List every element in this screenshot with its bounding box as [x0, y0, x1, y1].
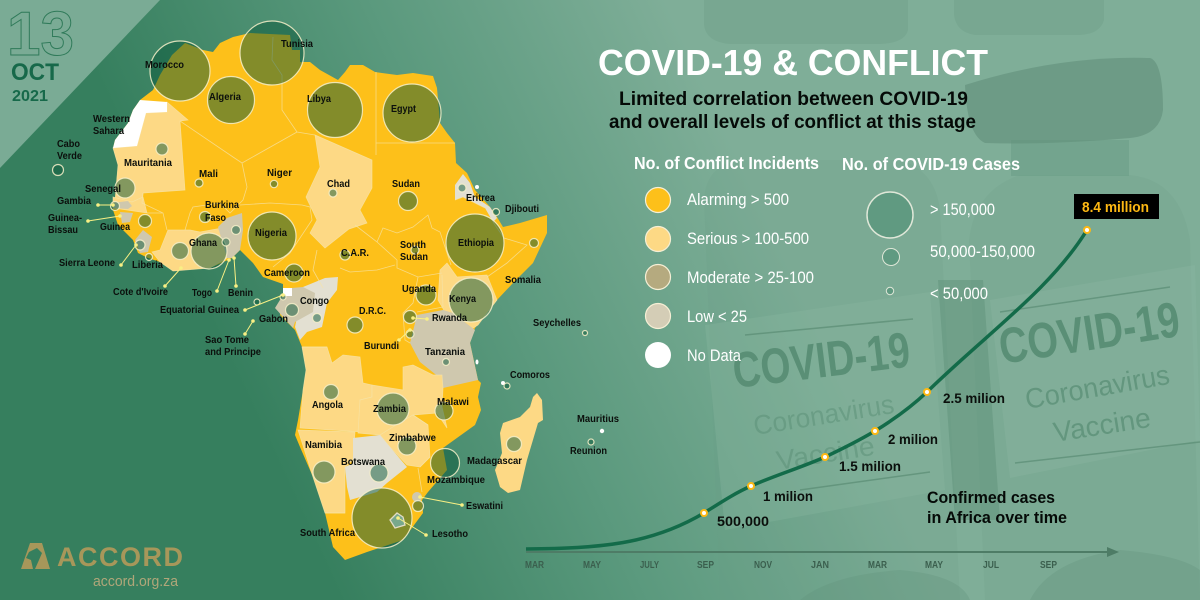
- cases curve: [526, 230, 1087, 549]
- month labels: MAR: [868, 560, 888, 571]
- label: Reunion: Reunion: [570, 445, 607, 457]
- map of Africa: [112, 33, 604, 560]
- value label: 500,000: 500,000: [717, 513, 769, 529]
- Tanzania: low: [410, 310, 478, 388]
- label: Somalia: Somalia: [505, 274, 541, 286]
- title: COVID-19 & CONFLICT: [598, 42, 988, 83]
- chart caption line 1: Confirmed cases: [927, 489, 1055, 507]
- label: Angola: Angola: [312, 399, 343, 411]
- month labels: JULY: [640, 560, 659, 571]
- bubble: Namibia: [313, 461, 335, 483]
- bubble: Mauritania: [156, 143, 168, 155]
- Sierra Leone: low: [135, 230, 152, 253]
- chart caption line 2: in Africa over time: [927, 509, 1067, 527]
- leader lines: [86, 203, 464, 537]
- marker: 1 million: [748, 483, 754, 489]
- leader: Guinea-Bissau: [86, 214, 122, 223]
- date: month: OCT: [11, 59, 59, 86]
- label: Verde: Verde: [57, 150, 82, 162]
- legend item: under 50,000: < 50,000: [930, 285, 988, 303]
- logo wordmark: ACCORD: [57, 542, 183, 572]
- label: Mauritania: Mauritania: [124, 157, 172, 169]
- bubble: Chad: [329, 189, 337, 197]
- bubble: Burkina Faso: [200, 212, 210, 222]
- bubble: Botswana: [370, 464, 388, 482]
- bubble: Libya: [308, 82, 362, 138]
- value label: 1.5 milion: 1.5 milion: [839, 458, 901, 474]
- legend item: alarming: [646, 188, 789, 212]
- callout: 8.4 million: [1074, 194, 1159, 219]
- bubble: Eswatini: [412, 500, 424, 512]
- continent base: alarming: [112, 33, 547, 560]
- Chad: serious: [306, 135, 372, 248]
- label: Ghana: Ghana: [189, 237, 217, 249]
- bubble: Kenya: [449, 278, 493, 322]
- Kenya: serious: [438, 263, 497, 330]
- Cote d'Ivoire and Ghana: serious: [152, 228, 227, 271]
- legend heading: No. of Conflict Incidents: [634, 153, 819, 173]
- label: Chad: Chad: [327, 178, 350, 190]
- month labels: SEP: [697, 560, 714, 571]
- bubble: Tunisia: [240, 21, 304, 85]
- label: Cameroon: Cameroon: [264, 267, 310, 279]
- leader: Sao Tome: [243, 319, 255, 336]
- Congo: low: [295, 277, 338, 340]
- top vial cap: [954, 0, 1104, 35]
- label: Congo: Congo: [300, 295, 329, 307]
- label: Sierra Leone: Sierra Leone: [59, 257, 115, 269]
- legend item: serious: [646, 226, 809, 252]
- label: South: South: [400, 239, 426, 251]
- legend item: moderate: [646, 264, 814, 290]
- bubble: South Sudan: [411, 246, 419, 254]
- leader: Lesotho: [396, 516, 428, 537]
- label: Guinea: Guinea: [100, 221, 130, 233]
- bubble: Gambia: [110, 202, 120, 210]
- bubble: Tanzania: [442, 358, 450, 366]
- leader: Eswatini: [418, 495, 464, 507]
- marker: 500,000: [701, 510, 707, 516]
- marker: 1.5 million: [822, 454, 828, 460]
- label: Liberia: Liberia: [132, 259, 163, 271]
- label: Sudan: Sudan: [392, 178, 420, 190]
- bubble: Uganda: [416, 285, 436, 305]
- island: Zanzibar: [476, 360, 478, 364]
- vial bases: [800, 550, 1200, 600]
- bubble: Togo: [222, 238, 230, 246]
- label: Senegal: Senegal: [85, 183, 121, 195]
- subtitle line 1: Limited correlation between COVID-19: [619, 89, 968, 110]
- legend item: low: [646, 304, 747, 328]
- label: Botswana: Botswana: [341, 456, 385, 468]
- label: Seychelles: Seychelles: [533, 317, 581, 329]
- leader: Sierra Leone: [119, 243, 138, 267]
- leader: Rwanda: [411, 316, 429, 321]
- leader: Equatorial Guinea: [243, 293, 285, 312]
- subtitle line 2: and overall levels of conflict at this stage: [609, 112, 976, 133]
- label: Tanzania: Tanzania: [425, 346, 465, 358]
- bubble: Liberia: [146, 254, 152, 260]
- legend item: serious: Serious > 100-500: [687, 230, 809, 248]
- internal borders: [142, 37, 527, 513]
- label: Sudan (South): Sudan: [400, 251, 428, 263]
- country labels: [48, 38, 619, 540]
- label: Eritrea: Eritrea: [466, 192, 495, 204]
- label: Equatorial Guinea: Equatorial Guinea: [160, 304, 239, 316]
- bubble: Senegal: [115, 178, 135, 198]
- label: Nigeria: Nigeria: [255, 227, 287, 239]
- legend item: 50,000-150,000: [882, 243, 1035, 266]
- label: C.A.R.: C.A.R.: [341, 247, 369, 259]
- bubble: Egypt: [383, 84, 441, 142]
- label: Cote d'Ivoire: Cote d'Ivoire: [113, 286, 168, 298]
- bubble: Eritrea: [458, 184, 466, 192]
- label: Algeria: Algeria: [209, 91, 241, 103]
- bubble: Comoros: [504, 383, 510, 389]
- bubble: Algeria: [208, 76, 254, 124]
- island: Mauritius: [600, 429, 604, 433]
- legend: COVID-19 cases: [842, 154, 1035, 303]
- bubble: Equatorial Guinea: [280, 294, 286, 300]
- value label: 2 milion: 2 milion: [888, 431, 938, 447]
- left vial label: [705, 292, 945, 530]
- bubble: Mozambique: [430, 448, 460, 478]
- time axis arrow: [526, 547, 1119, 557]
- Togo and Benin: low: [218, 213, 243, 258]
- bubble: Cote d'Ivoire: [172, 242, 188, 260]
- bubble: Cabo Verde: [52, 164, 64, 176]
- label: Western: Western: [93, 113, 130, 125]
- label: Malawi: Malawi: [437, 396, 469, 408]
- Western Sahara: no data: [113, 100, 167, 148]
- Eritrea: low: [455, 174, 497, 222]
- label: Sahara: Sahara: [93, 125, 124, 137]
- label: Benin: Benin: [228, 287, 253, 299]
- label: South Africa: South Africa: [300, 527, 355, 539]
- label: Niger: Niger: [267, 167, 292, 179]
- label: Comoros: Comoros: [510, 369, 550, 381]
- label: Zimbabwe: Zimbabwe: [389, 432, 436, 444]
- Mauritania: serious: [113, 102, 188, 203]
- leader: Burundi: [397, 328, 412, 342]
- leader: Cote d'Ivoire: [163, 266, 183, 288]
- bubble: Zambia: [377, 393, 409, 425]
- dark gap between vials: [938, 280, 1000, 520]
- label: Uganda: Uganda: [402, 283, 436, 295]
- label: Togo: Togo: [192, 287, 212, 299]
- month labels: MAY: [583, 560, 601, 571]
- Namibia: serious: [298, 430, 355, 513]
- label: Morocco: Morocco: [145, 59, 184, 71]
- left vial vaccine text: Vaccine: [774, 431, 877, 476]
- month labels: JUL: [983, 560, 999, 571]
- label: Kenya: Kenya: [449, 293, 476, 305]
- month labels: MAY: [925, 560, 943, 571]
- legend item: alarming: Alarming > 500: [687, 191, 789, 209]
- Angola: serious: [300, 347, 372, 432]
- bubble: Guinea: [138, 214, 152, 228]
- bubble: Gabon: [286, 304, 298, 316]
- Gambia: low: [112, 201, 132, 209]
- right vial coronavirus text: Coronavirus: [1023, 359, 1172, 415]
- Senegal: serious: [113, 197, 147, 213]
- value label: 2.5 milion: 2.5 milion: [943, 390, 1005, 406]
- label: Mozambique: Mozambique: [427, 474, 485, 486]
- marker: 2.5 million: [924, 389, 930, 395]
- legend item: no data: No Data: [687, 347, 742, 365]
- bubble: Rwanda: [404, 310, 416, 324]
- label: Burkina: Burkina: [205, 199, 239, 211]
- legend heading: No. of COVID-19 Cases: [842, 154, 1020, 174]
- bubble: Seychelles: [582, 330, 588, 336]
- bubble: Benin: [232, 226, 240, 234]
- label: Burundi: Burundi: [364, 340, 399, 352]
- left vial coronavirus text: Coronavirus: [751, 389, 896, 441]
- label rule lines: [745, 287, 1200, 490]
- label: Gambia: Gambia: [57, 195, 91, 207]
- logo mark: [21, 543, 50, 569]
- legend item: over 150,000: [867, 192, 995, 238]
- label: Sao Tome: Sao Tome: [205, 334, 249, 346]
- bubble: C.A.R.: [340, 250, 350, 260]
- label: and Principe: and Principe: [205, 346, 261, 358]
- date banner triangle: [0, 0, 160, 168]
- bubble: Ethiopia: [446, 214, 504, 272]
- label: Rwanda: Rwanda: [432, 312, 467, 324]
- Guinea-Bissau: low: [120, 212, 133, 223]
- label: Mauritius: Mauritius: [577, 413, 619, 425]
- leader: Togo: [215, 258, 231, 293]
- right vial cap: [965, 58, 1163, 143]
- Zimbabwe: serious: [380, 415, 430, 467]
- legend item: moderate: Moderate > 25-100: [687, 269, 814, 287]
- right vial neck: [1011, 140, 1129, 176]
- ACCORD logo: [21, 542, 183, 590]
- Equatorial Guinea: no data: [283, 288, 292, 296]
- bubble: Sierra Leone: [135, 240, 145, 250]
- marker: 2 million: [872, 428, 878, 434]
- bubble: Madagascar: [506, 436, 522, 452]
- bubble: Congo: [312, 314, 322, 322]
- bubble: Nigeria: [248, 212, 296, 260]
- right vial vaccine text: Vaccine: [1051, 402, 1153, 448]
- label: Egypt: Egypt: [391, 103, 416, 115]
- bubble: Djibouti: [492, 208, 500, 216]
- month labels: MAR: [525, 560, 545, 571]
- label: Cabo: Cabo: [57, 138, 80, 150]
- label: Namibia: Namibia: [305, 439, 342, 451]
- bubble: Mali: [195, 179, 203, 187]
- bubble: Burundi: [406, 330, 414, 338]
- right vial shoulders and body: [969, 175, 1200, 600]
- logo url: accord.org.za: [93, 574, 179, 590]
- left vial printed text: COVID-19: [730, 322, 913, 399]
- label: Ethiopia: Ethiopia: [458, 237, 494, 249]
- island: Grande Comore: [501, 381, 505, 385]
- Eswatini: low: [412, 492, 422, 502]
- date: day: 13: [7, 0, 74, 69]
- date: year: 2021: [12, 88, 48, 105]
- COVID-19 case bubbles: [52, 21, 594, 548]
- label: Gabon: Gabon: [259, 313, 288, 325]
- bubble: Niger: [270, 180, 278, 188]
- legend item: 50,000-150,000: 50,000-150,000: [930, 243, 1035, 261]
- legend item: no data: [645, 342, 742, 368]
- month labels: JAN: [811, 560, 829, 571]
- legend item: over 150,000: > 150,000: [930, 201, 995, 219]
- label: Guinea-: Guinea-: [48, 212, 82, 224]
- label: Libya: Libya: [307, 93, 331, 105]
- Lesotho outline: [390, 513, 405, 528]
- label: Zambia: Zambia: [373, 403, 406, 415]
- label: D.R.C.: D.R.C.: [359, 305, 386, 317]
- Botswana: low: [345, 435, 407, 500]
- month labels: NOV: [754, 560, 772, 571]
- label: Bissau: Bissau: [48, 224, 78, 236]
- bubble: Reunion: [588, 439, 594, 445]
- marker: 8.4 million: [1084, 227, 1090, 233]
- Zambia and Malawi: serious: [358, 365, 447, 435]
- legend: conflict incidents: [634, 153, 819, 368]
- label: Tunisia: Tunisia: [281, 38, 313, 50]
- value label: 1 milion: 1 milion: [763, 488, 813, 504]
- bubble: D.R.C.: [347, 317, 363, 333]
- Madagascar: serious: [495, 393, 543, 493]
- label: Mali: Mali: [199, 168, 218, 180]
- leader: Benin: [232, 256, 238, 288]
- leader: Gambia: [96, 203, 115, 207]
- bubble: Somalia: [530, 238, 538, 248]
- background: vaccine vials: [704, 0, 1200, 600]
- left vial body: [704, 160, 960, 600]
- bubble: Sudan: [398, 192, 418, 210]
- bubble: Sao Tome: [254, 299, 260, 305]
- month labels: [525, 560, 1057, 571]
- bubble: South Africa: [352, 488, 412, 548]
- bubble: Cameroon: [285, 264, 303, 282]
- bubble: Malawi: [435, 402, 453, 420]
- callout: 8.4 million: 8.4 million: [1082, 200, 1149, 216]
- bubble: Morocco: [150, 41, 210, 101]
- left vial cap: [704, 0, 908, 44]
- island: Socotra: [475, 185, 479, 189]
- right vial label: [990, 265, 1200, 478]
- line chart: confirmed cases over time: [525, 194, 1159, 571]
- bubble: Zimbabwe: [398, 437, 416, 455]
- label: Lesotho: Lesotho: [432, 528, 468, 540]
- bubble: Ghana: [191, 233, 227, 269]
- legend item: under 50,000: [886, 285, 988, 303]
- month labels: SEP: [1040, 560, 1057, 571]
- label: Eswatini: Eswatini: [466, 500, 503, 512]
- label: Faso: Faso: [205, 212, 226, 224]
- bubble: Angola: [324, 384, 338, 400]
- label: Djibouti: Djibouti: [505, 203, 539, 215]
- Gabon: low: [275, 287, 315, 328]
- legend item: low: Low < 25: [687, 308, 747, 326]
- label: Madagascar: Madagascar: [467, 455, 522, 467]
